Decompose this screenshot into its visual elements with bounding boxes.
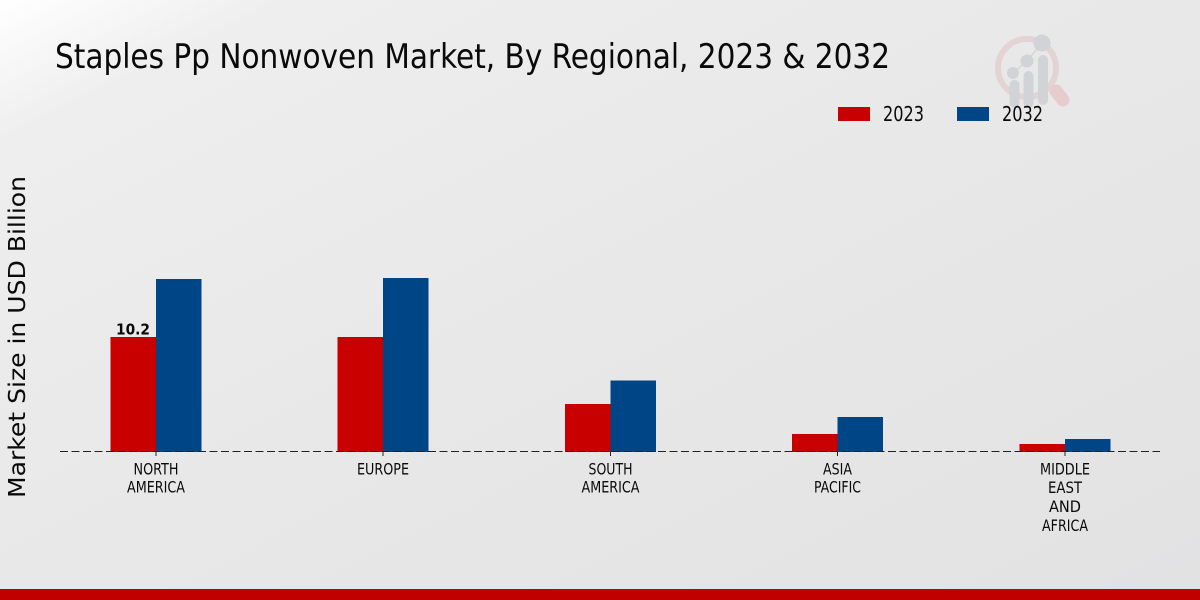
legend: 2023 (838, 102, 924, 126)
label: Europe (357, 452, 409, 478)
bars: North America (110, 279, 202, 452)
legend: 2032 (957, 102, 1043, 126)
label: North America: NORTH (134, 460, 178, 478)
baseline (60, 450, 1160, 452)
bars: South America (565, 380, 656, 452)
label: South America: SOUTH (588, 460, 632, 478)
label: South America: AMERICA (582, 478, 640, 496)
label: Asia Pacific: PACIFIC (814, 478, 861, 496)
label: Middle East and Africa (1040, 452, 1090, 535)
label: Middle East and Africa: MIDDLE (1040, 460, 1090, 478)
label: North America (127, 452, 185, 496)
label: Europe: EUROPE (357, 460, 409, 478)
label: Asia Pacific: ASIA (823, 460, 852, 478)
label: South America (582, 452, 640, 496)
label: North America: AMERICA (127, 478, 185, 496)
legend: 2032: 2032 (1002, 102, 1043, 126)
bars: Europe (338, 278, 428, 452)
value label: 10.2 (116, 320, 150, 338)
legend (838, 102, 1043, 126)
label: Middle East and Africa: EAST (1048, 478, 1082, 497)
x axis labels (127, 452, 1090, 535)
title: Staples Pp Nonwoven Market, By Regional, 2023 & 2032 (55, 37, 890, 77)
label: Middle East and Africa: AFRICA (1042, 516, 1088, 535)
label: Asia Pacific (814, 452, 861, 496)
bar chart (60, 278, 1160, 452)
icon: logo watermark (998, 34, 1063, 108)
label: Middle East and Africa: AND (1049, 497, 1081, 516)
bars: Asia Pacific (792, 417, 883, 452)
footer bar (0, 589, 1200, 600)
bars: Middle East and Africa (1020, 439, 1110, 452)
y axis label: Market Size in USD Billion (5, 176, 31, 498)
legend: 2023: 2023 (883, 102, 924, 126)
